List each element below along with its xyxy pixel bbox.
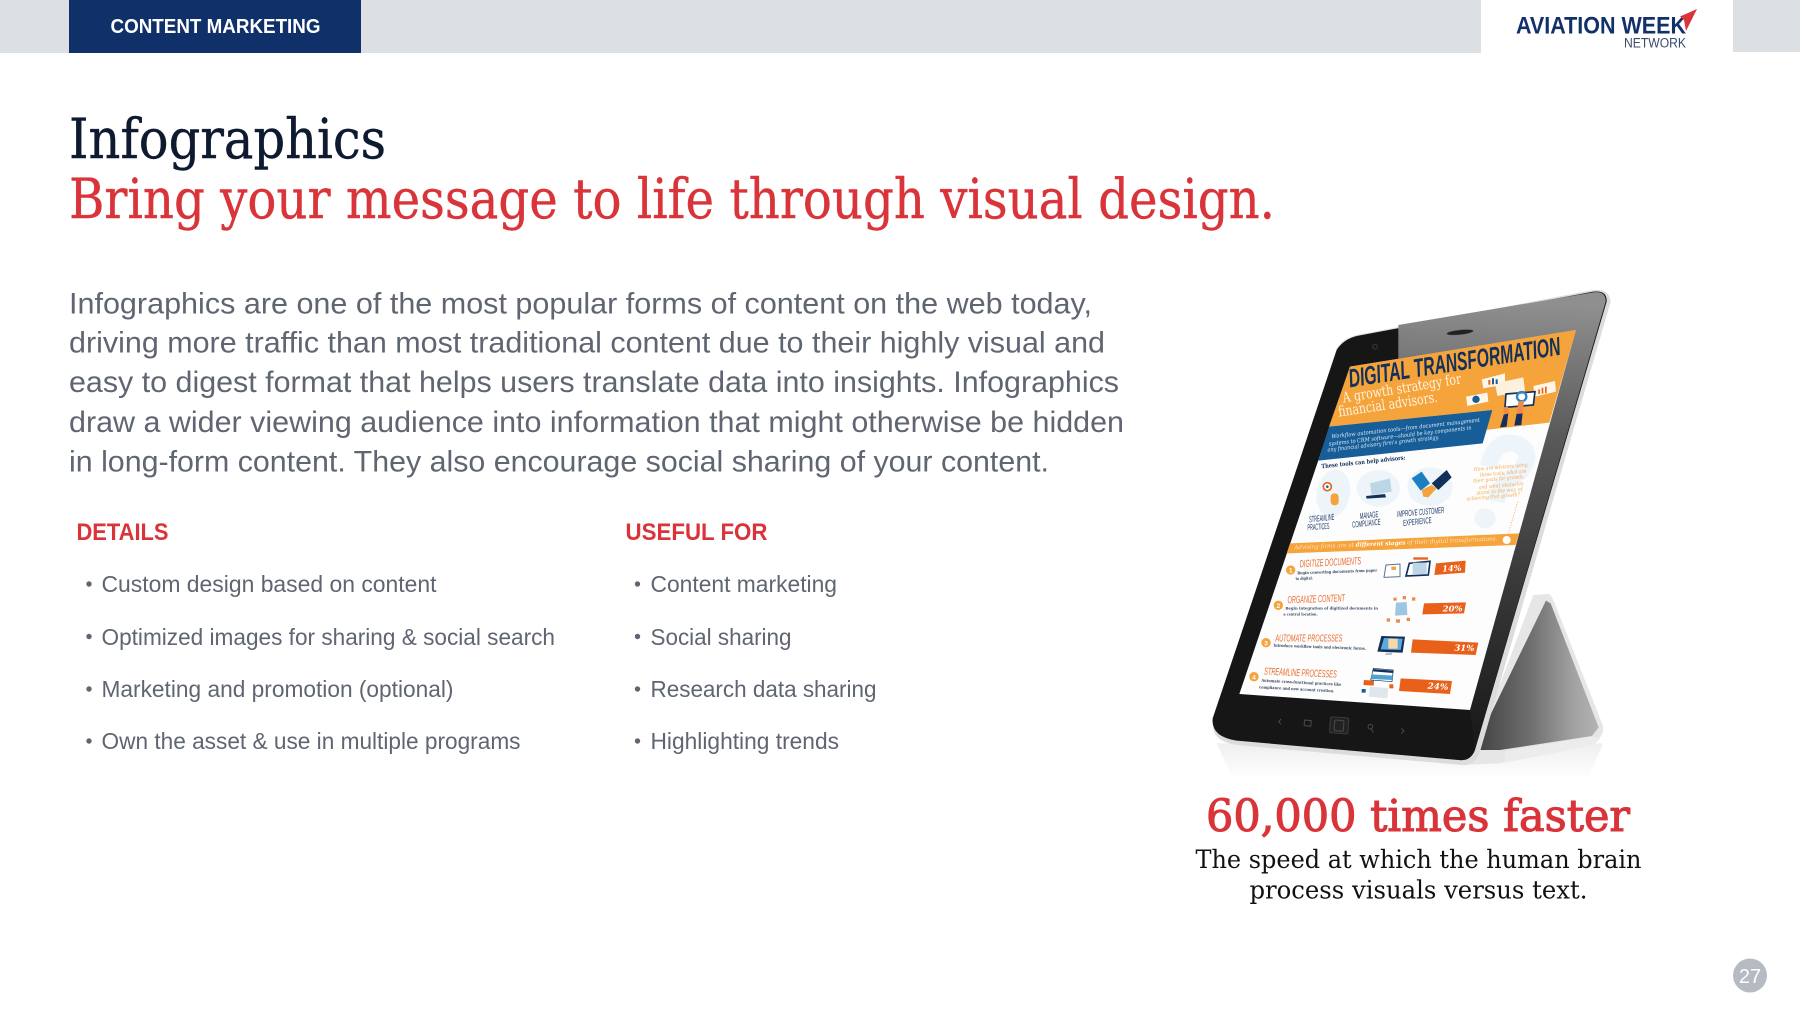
stage 4 bar: [1399, 678, 1452, 694]
details list: Optimized images for sharing & social search: [102, 624, 555, 650]
stage 2 row: Begin integration of digitized documents in: [1285, 605, 1378, 610]
stand: [1470, 594, 1603, 765]
stage 1 row: DIGITIZE DOCUMENTS: [1300, 556, 1361, 570]
stage 2 row: 20%: [1442, 603, 1463, 613]
screen subtitle: financial advisors.: [1337, 390, 1439, 421]
stage 1 row: 1: [1289, 568, 1293, 575]
title: Infographics: [69, 107, 386, 171]
details list: Own the asset & use in multiple programs: [102, 728, 520, 754]
header bar: [0, 0, 1800, 53]
icon labels: IMPROVE CUSTOMER: [1397, 505, 1445, 519]
caption: [1196, 845, 1642, 904]
stage 1 bar: [1434, 561, 1466, 575]
orange stages band: Advising firms are at different stages of their digital transformations.: [1293, 535, 1498, 551]
question mark callout: these tools, what are: [1480, 469, 1527, 479]
useful for heading: USEFUL FOR: [626, 519, 768, 546]
stage 3 row: Introduce workflow tools and electronic forms.: [1273, 643, 1367, 651]
stage 1 row: [1286, 556, 1466, 581]
stage 2 row: [1274, 593, 1466, 623]
camera: [1373, 344, 1377, 349]
stage 1 row: 14%: [1442, 563, 1462, 574]
question mark callout: [1466, 443, 1529, 533]
question mark callout: How are advisors using: [1473, 462, 1529, 473]
icon labels: EXPERIENCE: [1402, 515, 1432, 528]
blue intro band: any financial advisory firm's growth strategy.: [1327, 435, 1440, 454]
stage 2 row: 2: [1276, 603, 1280, 610]
details list: Custom design based on content: [102, 571, 437, 597]
tools heading: These tools can help advisors:: [1321, 455, 1406, 470]
icon: target: [1313, 467, 1354, 520]
blue intro band: Workflow automation tools—from document management: [1331, 418, 1481, 440]
icon: compliance: [1357, 470, 1400, 507]
details list: Marketing and promotion (optional): [102, 676, 454, 702]
stage 4 row: compliance and new account creation.: [1259, 684, 1335, 693]
logo: Aviation Week Network: NETWORK: [1624, 36, 1686, 50]
stage 1 row: to digital.: [1296, 575, 1314, 581]
intro paragraph: [69, 288, 1124, 478]
title: [69, 107, 1275, 231]
icon labels: [1307, 505, 1445, 532]
page number: [1733, 958, 1767, 992]
stage 4 row: 24%: [1426, 681, 1449, 692]
stage 3 icon: [1377, 636, 1405, 653]
stage 2 row: ORGANIZE CONTENT: [1287, 593, 1345, 606]
stage 4 icon: [1371, 668, 1393, 682]
reflection: [1217, 743, 1603, 780]
caption: process visuals versus text.: [1250, 876, 1588, 904]
screen header: [1329, 330, 1576, 430]
details list: [86, 571, 555, 754]
statistic callout: [1196, 791, 1642, 904]
useful for list: [635, 571, 876, 754]
intro paragraph: easy to digest format that helps users translate data into insights. Infographics: [69, 366, 1119, 399]
details column: [76, 519, 555, 754]
home buttons: [1279, 717, 1404, 734]
stage 1 row: Begin converting documents from paper: [1297, 568, 1378, 575]
blue intro band: systems to CRM software—should be key components in: [1329, 425, 1472, 448]
intro paragraph: Infographics are one of the most popular forms of content on the web today,: [69, 288, 1092, 320]
logo: Aviation Week Network: [1516, 9, 1697, 50]
icon labels: COMPLIANCE: [1351, 517, 1381, 530]
screen subtitle: [1337, 371, 1463, 421]
stage 4 row: [1249, 667, 1452, 698]
stage 3 row: 3: [1264, 640, 1268, 647]
useful for column: [626, 519, 876, 754]
useful for list: Social sharing: [650, 624, 792, 650]
question mark callout: their goals for growth,: [1473, 474, 1525, 485]
icon: handshake: [1407, 467, 1453, 506]
tablet body: [1213, 290, 1611, 765]
stage 3 row: AUTOMATE PROCESSES: [1275, 633, 1342, 644]
stage 3 bar: [1411, 639, 1478, 655]
icon labels: STREAMLINE: [1308, 512, 1335, 524]
section label: CONTENT MARKETING: [110, 16, 320, 38]
blue intro band: [1318, 410, 1492, 461]
intro paragraph: in long-form content. They also encourage social sharing of your content.: [69, 446, 1049, 478]
stage 3 row: [1261, 633, 1478, 655]
screen: [1239, 330, 1576, 710]
details heading: DETAILS: [76, 519, 168, 546]
stage 4 row: STREAMLINE PROCESSES: [1264, 667, 1337, 681]
screen title: DIGITAL TRANSFORMATION: [1346, 331, 1563, 393]
stage 4 row: Automate cross-functional practices like: [1260, 678, 1342, 687]
icon labels: MANAGE: [1359, 509, 1379, 521]
stage 3 row: 31%: [1454, 643, 1475, 653]
big number: 60,000 times faster: [1206, 791, 1631, 842]
stage 2 icon: [1395, 602, 1407, 616]
stage 2 bar: [1422, 602, 1466, 614]
useful for list: Research data sharing: [650, 676, 876, 702]
useful for list: Highlighting trends: [650, 728, 839, 754]
intro paragraph: driving more traffic than most traditional content due to their highly visual and: [69, 326, 1105, 360]
caption: The speed at which the human brain: [1196, 845, 1642, 874]
question mark callout: and what obstacles: [1479, 481, 1524, 491]
subtitle: Bring your message to life through visual design.: [69, 167, 1275, 231]
header charts and hands icon: [1466, 373, 1556, 427]
intro paragraph: draw a wider viewing audience into information that might otherwise be hidden: [69, 406, 1124, 439]
speaker: [1446, 329, 1474, 336]
question mark callout: achieving that growth?: [1466, 492, 1520, 503]
question mark callout: stand in the way of: [1476, 487, 1524, 497]
icon labels: PRACTICES: [1307, 521, 1330, 532]
page number: 27: [1739, 966, 1761, 988]
stage 1 icon: [1384, 564, 1400, 577]
tablet illustration: [1213, 290, 1611, 780]
useful for list: Content marketing: [650, 571, 837, 597]
stage 2 row: a central location.: [1283, 611, 1318, 616]
stage 4 row: 4: [1252, 674, 1256, 681]
screen subtitle: A growth strategy for: [1341, 371, 1463, 407]
logo: Aviation Week Network: AVIATION WEEK: [1516, 12, 1687, 40]
